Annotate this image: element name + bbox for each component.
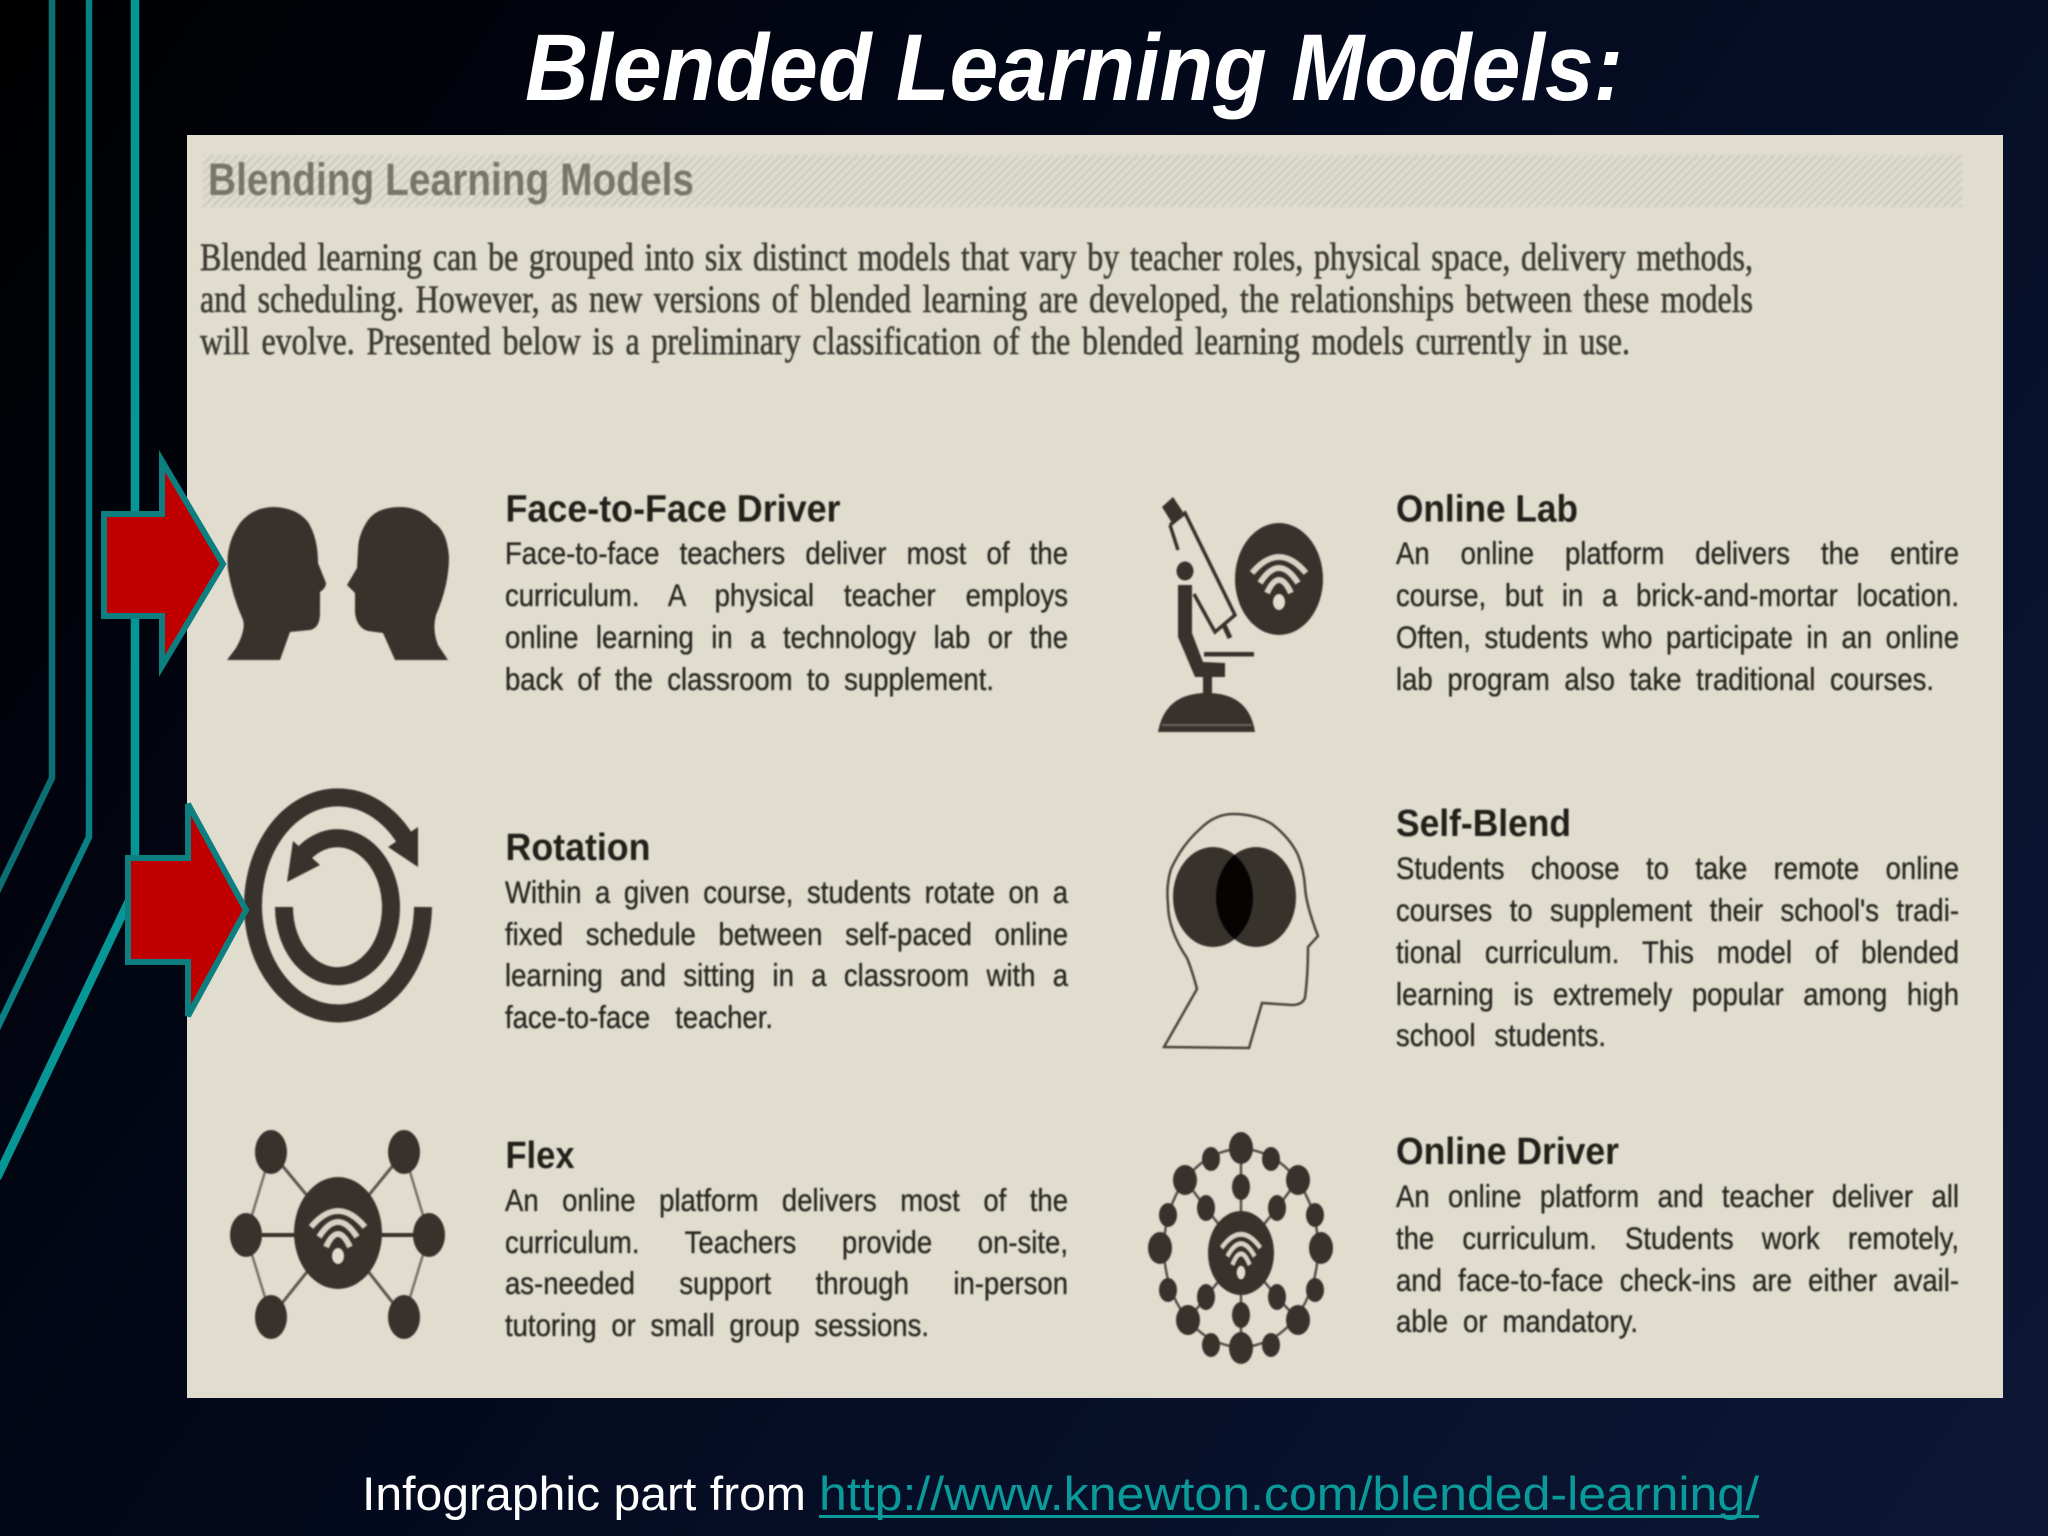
model: online driver: [1147, 1131, 1959, 1365]
description: self-blend: tional curriculum. This model of blended: [1396, 934, 1959, 970]
arrow: red pointer to face-to-face driver: [101, 450, 226, 677]
description: self-blend: school students.: [1396, 1018, 1606, 1053]
intro paragraph: Blended learning can be grouped into six distinct models that vary by teacher roles, physical space, delivery methods,: [200, 235, 1753, 279]
model: self-blend: [1161, 803, 1959, 1053]
panel: blended learning models image: [187, 135, 2003, 1398]
description: online driver: able or mandatory.: [1396, 1304, 1638, 1339]
description: flex: An online platform delivers most of the: [505, 1182, 1068, 1218]
description: rotation: face-to-face teacher.: [505, 1000, 773, 1035]
description: online driver: [1395, 1178, 1959, 1340]
footer source line: [362, 1467, 1760, 1520]
icon: online driver ring network: [1148, 1132, 1333, 1364]
model: face-to-face driver: [226, 488, 1068, 698]
description: rotation: [504, 874, 1070, 1035]
description: flex: curriculum. Teachers provide on-site,: [505, 1224, 1068, 1260]
model: flex: [229, 1129, 1068, 1344]
description: self-blend: learning is extremely popular among high: [1396, 976, 1959, 1011]
intro paragraph: will evolve. Presented below is a preliminary classification of the blended learning models currently in use.: [200, 318, 1630, 362]
description: face-to-face driver: Face-to-face teachers deliver most of the: [505, 536, 1068, 571]
model: rotation: [243, 787, 1070, 1035]
heading: online driver: Online Driver: [1396, 1131, 1619, 1173]
description: self-blend: Students choose to take remote online: [1396, 851, 1959, 886]
description: flex: as-needed support through in-person: [505, 1266, 1068, 1301]
footer source line: Infographic part from: [362, 1467, 806, 1520]
description: flex: tutoring or small group sessions.: [505, 1308, 929, 1343]
description: self-blend: [1395, 851, 1959, 1053]
icon: head with overlapping circles: [1164, 814, 1318, 1048]
description: online lab: course, but in a brick-and-mortar location.: [1396, 578, 1959, 613]
icon: flex network: [230, 1130, 445, 1339]
footer source line: http://www.knewton.com/blended-learning/: [819, 1467, 1760, 1520]
icon: rotation arrows: [253, 797, 423, 1013]
description: rotation: learning and sitting in a classroom with a: [505, 958, 1068, 993]
description: face-to-face driver: curriculum. A physical teacher employs: [505, 578, 1068, 613]
model: online lab: [1157, 488, 1959, 733]
description: online lab: An online platform delivers the entire: [1396, 536, 1959, 571]
description: face-to-face driver: [505, 536, 1068, 698]
description: face-to-face driver: back of the classroom to supplement.: [505, 661, 994, 697]
heading: rotation: Rotation: [506, 827, 650, 869]
arrow: red pointer to rotation: [125, 802, 250, 1018]
heading: self-blend: Self-Blend: [1396, 803, 1571, 845]
heading: flex: Flex: [506, 1135, 574, 1177]
description: online lab: [1395, 536, 1959, 698]
description: online driver: An online platform and teacher deliver all: [1396, 1178, 1959, 1214]
description: online lab: Often, students who participate in an online: [1396, 619, 1959, 655]
heading: online lab: Online Lab: [1396, 488, 1578, 530]
description: online lab: lab program also take traditional courses.: [1396, 661, 1934, 697]
intro paragraph: and scheduling. However, as new versions of blended learning are developed, the relationships between these models: [200, 277, 1753, 321]
icon: microscope with wifi: [1158, 497, 1323, 732]
description: self-blend: courses to supplement their school's tradi-: [1396, 892, 1959, 928]
icon: two facing heads: [227, 507, 449, 660]
description: online driver: and face-to-face check-ins are either avail-: [1396, 1262, 1959, 1297]
intro paragraph: [198, 235, 1753, 364]
description: flex: [504, 1182, 1068, 1344]
description: face-to-face driver: online learning in a technology lab or the: [505, 619, 1068, 655]
description: rotation: fixed schedule between self-paced online: [505, 916, 1068, 951]
description: online driver: the curriculum. Students work remotely,: [1396, 1220, 1959, 1256]
description: rotation: Within a given course, students rotate on a: [505, 874, 1068, 910]
hatched heading band: [203, 155, 1962, 207]
heading: face-to-face driver: Face-to-Face Driver: [506, 488, 841, 530]
